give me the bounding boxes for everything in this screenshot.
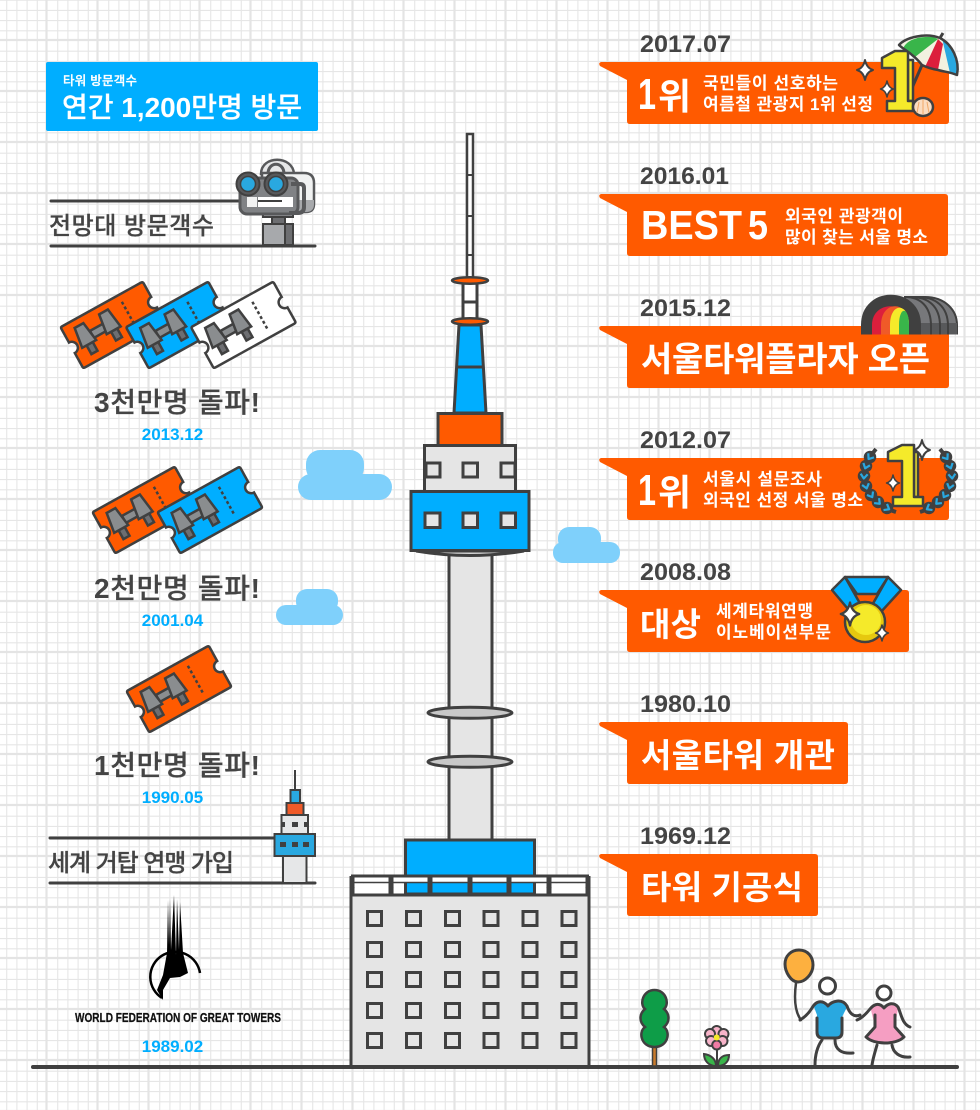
description: 여름철 관광지 1위 선정 (703, 95, 873, 114)
icon: laurel trophy (859, 440, 957, 515)
icon: coin binoculars (236, 160, 314, 245)
heading: 서울타워 개관 (641, 737, 835, 774)
blue base (406, 840, 534, 894)
award: 대상 (640, 606, 701, 643)
icon: people with balloon (785, 950, 910, 1065)
ticket: 10 million (126, 646, 232, 732)
date: 2008.08 (640, 559, 731, 586)
timeline 1980.10 (599, 691, 848, 784)
girl (857, 986, 910, 1065)
banner (599, 590, 909, 652)
tickets: 30 million (60, 282, 296, 368)
ground line (33, 1065, 957, 1069)
description (703, 470, 863, 510)
mast rings (452, 277, 488, 325)
date: 1990.05: 1990.05 (142, 788, 203, 807)
icon: rainbow tunnel (862, 296, 957, 335)
tickets: 20 million (92, 467, 263, 553)
banner (599, 854, 818, 916)
best 5: 5 (748, 202, 768, 248)
rank: 1 (638, 466, 656, 515)
milestone: 10 million: 1천만명 돌파! (94, 750, 260, 781)
timeline 2008.08 (599, 559, 909, 652)
date: 2013.12: 2013.12 (142, 425, 203, 444)
milestone: 30 million: 3천만명 돌파! (94, 387, 260, 418)
blue spire (454, 325, 486, 413)
description (716, 602, 831, 642)
banner (599, 722, 848, 784)
timeline 2015.12 (599, 295, 957, 388)
icon: medal (832, 577, 901, 642)
banner (599, 326, 949, 388)
orange deck (438, 414, 502, 446)
roof railing (351, 876, 589, 895)
rank: 위 (658, 76, 691, 117)
description: 세계타워연맹 (716, 602, 813, 621)
antenna (467, 134, 473, 279)
description: 외국인 선정 서울 명소 (703, 491, 863, 510)
icon: trophy number with umbrella (857, 33, 958, 116)
balloon (785, 950, 813, 1020)
timeline 2012.07 (599, 427, 957, 520)
rank (638, 70, 691, 119)
annual visitors label: 타워 방문객수 (63, 74, 137, 88)
heading: world federation: 세계 거탑 연맹 가입 (48, 850, 234, 877)
timeline 2016.01 (599, 163, 948, 256)
blue observatory (411, 492, 529, 550)
date: 2015.12 (640, 295, 731, 322)
date: 2016.01 (640, 163, 729, 190)
description: 많이 찾는 서울 명소 (785, 228, 928, 247)
date: 2012.07 (640, 427, 731, 454)
tower illustration (351, 134, 589, 1067)
logo caption: WORLD FEDERATION OF GREAT TOWERS (75, 1011, 281, 1025)
annual visitors value: 연간 1,200만명 방문 (62, 92, 302, 123)
building (351, 895, 589, 1067)
rank (638, 466, 691, 515)
description (703, 74, 873, 114)
banner (599, 62, 949, 124)
date: 2001.04: 2001.04 (142, 611, 204, 630)
banner (599, 458, 949, 520)
description: 국민들이 선호하는 (703, 74, 838, 93)
best 5: BEST (641, 202, 742, 248)
shaft (449, 553, 492, 841)
date: 1989.02: 1989.02 (142, 1037, 203, 1056)
banner (599, 194, 948, 256)
timeline 1969.12 (599, 823, 818, 916)
milestone: 20 million: 2천만명 돌파! (94, 573, 260, 604)
heading: observatory visitors: 전망대 방문객수 (49, 213, 214, 240)
description: 이노베이션부문 (716, 623, 831, 642)
date: 1980.10 (640, 691, 731, 718)
logo: world federation of great towers (150, 895, 200, 1000)
clouds (276, 450, 620, 625)
upper mast (463, 283, 477, 321)
date: 1969.12 (640, 823, 731, 850)
timeline 2017.07 (599, 31, 958, 124)
heading: 타워 기공식 (641, 869, 803, 906)
icon: mini tower (274, 770, 315, 883)
panel: annual visitors (46, 62, 318, 131)
boy (800, 978, 860, 1065)
icon: tree (640, 990, 668, 1066)
date: 2017.07 (640, 31, 731, 58)
description (785, 207, 928, 247)
icon: flower (704, 1026, 729, 1066)
heading: world federation (48, 838, 315, 883)
rank: 위 (658, 472, 691, 513)
rank: 1 (638, 70, 656, 119)
shaft rings (428, 707, 512, 767)
grey observatory (424, 446, 516, 492)
description: 서울시 설문조사 (703, 470, 822, 489)
description: 외국인 관광객이 (785, 207, 903, 226)
heading: 서울타워플라자 오픈 (641, 341, 930, 379)
heading: observatory visitors (49, 201, 315, 246)
observatory underside (416, 551, 524, 556)
